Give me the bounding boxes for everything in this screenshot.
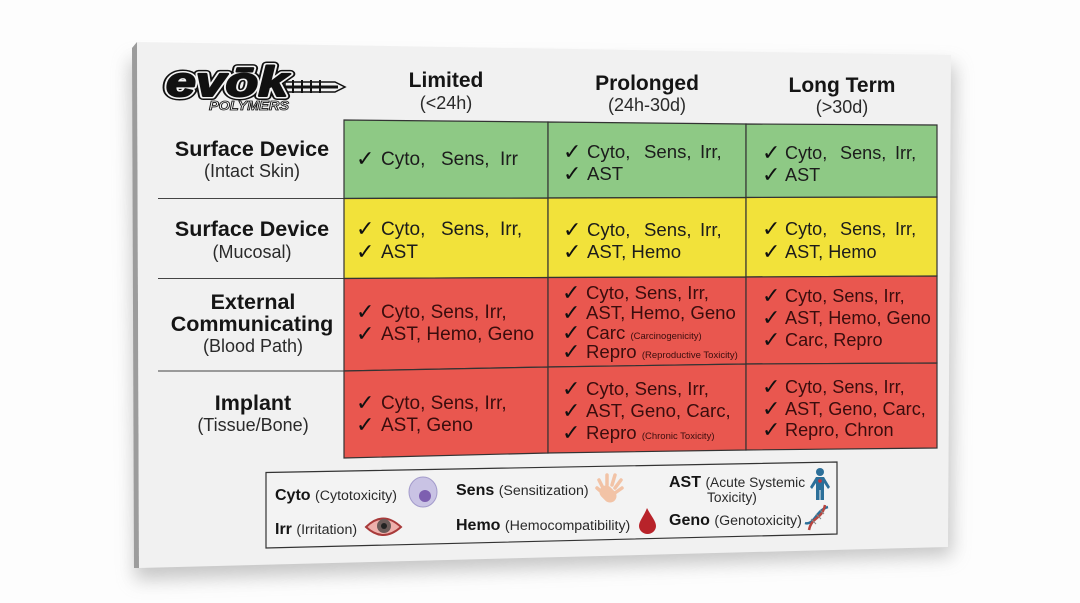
cell: implant, prolonged: Repro (Chronic Toxicity) xyxy=(586,422,714,443)
row header: External Communicating: (Blood Path) xyxy=(203,336,303,356)
cell: surface mucosal, long term: ✓ xyxy=(762,217,780,242)
cell: external, prolonged: ✓ xyxy=(562,321,580,346)
cell: surface mucosal, long term: Cyto, xyxy=(785,219,827,239)
cell: surface intact, prolonged: AST xyxy=(587,163,623,184)
cell: external, long term: ✓ xyxy=(762,328,780,353)
cell: surface mucosal, prolonged xyxy=(563,218,722,265)
cell: implant, limited: AST, Geno xyxy=(381,415,473,436)
cell: implant, long term: ✓ xyxy=(762,418,780,443)
row header: Implant: (Tissue/Bone) xyxy=(197,415,309,435)
cell: surface mucosal, long term: Sens, xyxy=(840,219,886,239)
cell: implant, long term: ✓ xyxy=(762,397,780,422)
cell: external, limited xyxy=(356,300,534,347)
cell: surface intact, limited xyxy=(356,147,519,172)
cell: implant, prolonged: ✓ xyxy=(562,399,580,424)
row header: Surface Device, Intact Skin: Surface Device xyxy=(175,137,329,161)
cell: external, prolonged: Repro (Reproductive Toxicity) xyxy=(586,341,738,362)
cell: surface intact, prolonged: Cyto, xyxy=(587,141,630,162)
cell: external, long term: ✓ xyxy=(762,306,780,331)
cell: external, long term: Carc, Repro xyxy=(785,330,883,350)
legend box xyxy=(266,462,837,548)
cell: surface intact, long term xyxy=(762,141,916,188)
cell: external, limited: Cyto, Sens, Irr, xyxy=(381,302,507,323)
legend: Sens: Sens (Sensitization) xyxy=(456,482,589,499)
cell: surface intact, long term: Irr, xyxy=(895,143,916,163)
cell: implant, limited: Cyto, Sens, Irr, xyxy=(381,393,507,414)
cell: surface mucosal, long term: AST, Hemo xyxy=(785,242,877,262)
row header: External Communicating xyxy=(171,290,333,356)
cell: surface intact, limited: Sens, xyxy=(441,149,490,170)
icon: DNA helix xyxy=(805,505,828,530)
row header: External Communicating: Communicating xyxy=(171,312,333,336)
cell: implant, limited xyxy=(356,391,507,438)
cell: external, long term: ✓ xyxy=(762,284,780,309)
column header: Prolonged xyxy=(595,72,699,115)
cell: surface intact, limited: ✓ xyxy=(356,147,374,172)
cell: surface mucosal, prolonged: Sens, xyxy=(644,219,692,240)
column header: Prolonged: (24h-30d) xyxy=(608,95,686,115)
cell: surface mucosal, long term: Irr, xyxy=(895,219,916,239)
row header: Implant xyxy=(197,391,309,435)
cell: surface intact, long term: Cyto, xyxy=(785,143,827,163)
cell: surface mucosal, prolonged: ✓ xyxy=(563,240,581,265)
legend: Hemo: Hemo (Hemocompatibility) xyxy=(456,517,630,534)
column header: Long Term xyxy=(789,74,895,117)
cell: implant, long term: Repro, Chron xyxy=(785,420,894,440)
column header: Prolonged: Prolonged xyxy=(595,72,699,95)
legend: Geno: Geno (Genotoxicity) xyxy=(669,512,802,529)
cell: surface mucosal, limited: ✓ xyxy=(356,240,374,265)
cell: implant, prolonged: AST, Geno, Carc, xyxy=(586,400,731,421)
cell: external, prolonged: ✓ xyxy=(562,340,580,365)
cell: implant, prolonged: ✓ xyxy=(562,421,580,446)
cell: surface intact, long term: ✓ xyxy=(762,163,780,188)
cell: external, long term xyxy=(762,284,931,353)
cell: external, prolonged: ✓ xyxy=(562,301,580,326)
logo: Evok Polymers: evōk xyxy=(166,58,291,105)
cell: external, prolonged: ✓ xyxy=(562,281,580,306)
row header: Surface Device, Intact Skin xyxy=(175,137,329,181)
column header: Limited: (<24h) xyxy=(420,93,472,113)
row dividers xyxy=(158,198,344,371)
cell: external, long term: AST, Hemo, Geno xyxy=(785,308,931,328)
legend: Cyto: Cyto (Cytotoxicity) xyxy=(275,487,397,504)
cell: surface mucosal, limited xyxy=(356,217,522,265)
icon: hand xyxy=(597,475,622,496)
legend: AST xyxy=(669,474,805,505)
cell: external, limited: ✓ xyxy=(356,300,374,325)
panel: board edge xyxy=(132,42,139,568)
cell: implant, long term: ✓ xyxy=(762,375,780,400)
cell: surface mucosal, long term xyxy=(762,217,916,265)
cell: external, limited: ✓ xyxy=(356,322,374,347)
cell: surface mucosal, prolonged: Irr, xyxy=(700,219,722,240)
row header: Implant: Implant xyxy=(215,391,291,415)
panel shadow xyxy=(130,60,955,580)
cell: surface intact, limited: Irr xyxy=(500,149,519,170)
cell: surface intact, long term: AST xyxy=(785,165,820,185)
icon: person xyxy=(810,468,830,500)
cell: external, prolonged: AST, Hemo, Geno xyxy=(586,302,736,323)
cell: surface mucosal, long term: ✓ xyxy=(762,240,780,265)
column header: Long Term: Long Term xyxy=(789,74,895,97)
cell: surface intact, prolonged: ✓ xyxy=(563,140,581,165)
icon: blood drop xyxy=(639,508,656,534)
cell: external, prolonged xyxy=(562,281,738,365)
cell: surface intact, long term: ✓ xyxy=(762,141,780,166)
icon: cell xyxy=(409,477,437,507)
logo: Evok Polymers: evōk xyxy=(166,58,291,105)
cell: surface intact, long term: Sens, xyxy=(840,143,886,163)
logo: Evok Polymers: POLYMERS xyxy=(209,99,290,113)
cell: surface mucosal, limited: Sens, xyxy=(441,219,490,240)
cell: surface mucosal, prolonged: ✓ xyxy=(563,218,581,243)
legend: AST: AST (Acute Systemic xyxy=(669,474,805,491)
row header: Surface Device, Intact Skin: (Intact Skin) xyxy=(204,161,300,181)
cell: implant, limited: ✓ xyxy=(356,413,374,438)
cell: surface mucosal, prolonged: AST, Hemo xyxy=(587,241,681,262)
cell: surface mucosal, limited: Irr, xyxy=(500,219,522,240)
cell: surface intact, prolonged: Irr, xyxy=(700,141,722,162)
cell: surface intact, prolonged: ✓ xyxy=(563,162,581,187)
cell: surface mucosal, limited: AST xyxy=(381,242,418,263)
cell: implant, prolonged xyxy=(562,377,731,446)
cell: external, limited: AST, Hemo, Geno xyxy=(381,324,534,345)
logo: Evok Polymers: evōk xyxy=(166,58,291,105)
cell: external, long term: Cyto, Sens, Irr, xyxy=(785,286,905,306)
cell: external, prolonged: Carc (Carcinogenicity) xyxy=(586,322,702,343)
cell: surface intact, prolonged: Sens, xyxy=(644,141,692,162)
cell: implant, prolonged: ✓ xyxy=(562,377,580,402)
column header: Long Term: (>30d) xyxy=(816,97,868,117)
icon: eye xyxy=(366,518,401,535)
cell: implant, long term: AST, Geno, Carc, xyxy=(785,399,926,419)
cell: surface mucosal, limited: ✓ xyxy=(356,217,374,242)
row header: External Communicating: External xyxy=(211,290,295,314)
legend: Irr: Irr (Irritation) xyxy=(275,521,357,538)
cell: surface intact, prolonged xyxy=(563,140,722,187)
cell: surface mucosal, prolonged: Cyto, xyxy=(587,219,630,240)
row header: Surface Device, Mucosal xyxy=(175,217,329,262)
cell: implant, prolonged: Cyto, Sens, Irr, xyxy=(586,378,709,399)
cell: implant, limited: ✓ xyxy=(356,391,374,416)
legend: AST: Toxicity) xyxy=(707,490,757,505)
cell: surface mucosal, limited: Cyto, xyxy=(381,219,425,240)
cell: implant, long term xyxy=(762,375,926,443)
panel: board xyxy=(137,42,951,568)
matrix background xyxy=(344,120,937,458)
row header: Surface Device, Mucosal: Surface Device xyxy=(175,217,329,241)
column header: Limited xyxy=(409,69,483,113)
cell: surface intact, limited: Cyto, xyxy=(381,149,425,170)
cell: external, prolonged: Cyto, Sens, Irr, xyxy=(586,282,709,303)
row header: Surface Device, Mucosal: (Mucosal) xyxy=(212,242,292,262)
logo: Evok Polymers xyxy=(166,58,345,113)
column header: Limited: Limited xyxy=(409,69,483,92)
cell: implant, long term: Cyto, Sens, Irr, xyxy=(785,377,905,397)
